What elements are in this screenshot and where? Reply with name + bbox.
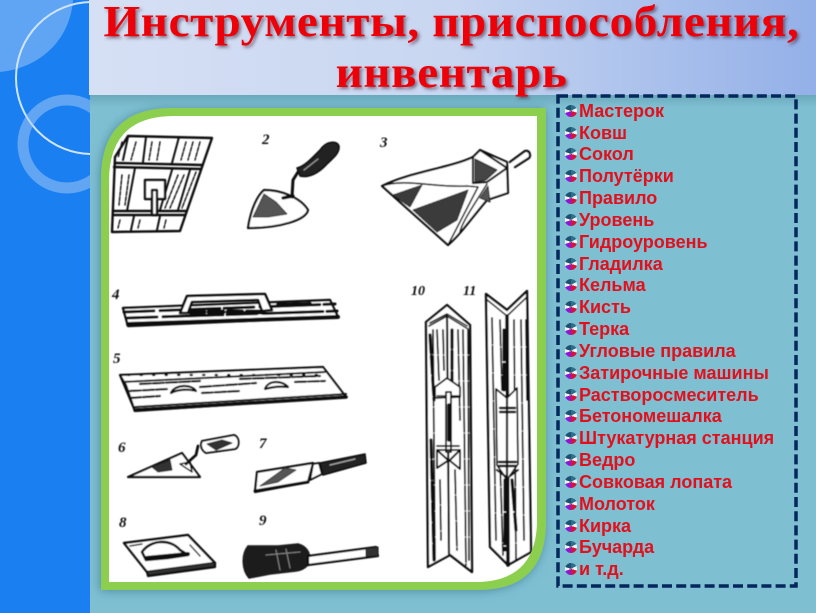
list item: Штукатурная станция — [579, 428, 774, 448]
list item: Совковая лопата — [579, 472, 732, 492]
title: инвентарь — [336, 48, 567, 97]
tool 5: rule with slots — [120, 367, 346, 411]
number 6: 6 — [118, 440, 126, 456]
header band — [89, 0, 816, 95]
picture frame with tool drawings — [95, 104, 550, 596]
dashed list box — [556, 94, 798, 588]
list item: Правило — [579, 188, 657, 208]
list item: Уровень — [579, 210, 654, 230]
list item: Полутёрки — [579, 166, 674, 186]
tool 8: hand float — [124, 535, 215, 576]
number 11: 11 — [463, 284, 476, 299]
tool 2: trowel — [248, 142, 339, 228]
list item: Затирочные машины — [579, 363, 769, 383]
list item: Растворосмеситель — [579, 385, 759, 405]
number 7: 7 — [259, 436, 267, 452]
number 5: 5 — [113, 351, 121, 367]
tool 3: scoop — [382, 150, 530, 245]
list item: Гидроуровень — [579, 232, 708, 252]
list item: Бучарда — [579, 537, 654, 557]
tool 4: float with handle — [123, 294, 338, 326]
list item: Ведро — [579, 450, 635, 470]
tool 7: spatula — [255, 454, 366, 492]
list item: Кельма — [579, 275, 646, 295]
number 9: 9 — [259, 513, 267, 529]
tool 10: corner rule — [426, 305, 472, 572]
tool 6: pointed trowel — [128, 435, 239, 477]
number 2: 2 — [261, 132, 270, 148]
left blue decorative band — [0, 0, 90, 613]
list item: Кирка — [579, 516, 631, 536]
number 4: 4 — [111, 287, 120, 303]
list item: Мастерок — [579, 101, 664, 121]
number 10: 10 — [411, 284, 425, 299]
tool 11: corner rule — [486, 291, 531, 565]
list item: Бетономешалка — [579, 406, 722, 426]
list item: Ковш — [579, 123, 627, 143]
list item: Угловые правила — [579, 341, 736, 361]
number 3: 3 — [379, 135, 388, 151]
list item: Молоток — [579, 494, 655, 514]
list item: Сокол — [579, 144, 634, 164]
list item: Гладилка — [579, 254, 663, 274]
tool 1: falcon board — [112, 136, 212, 232]
teal content shading — [90, 95, 816, 107]
number 8: 8 — [119, 515, 127, 531]
list item: Терка — [579, 319, 629, 339]
list item: и т.д. — [579, 559, 624, 579]
list item: Кисть — [579, 297, 631, 317]
title — [104, 0, 802, 100]
tool 9: brush — [243, 544, 378, 578]
